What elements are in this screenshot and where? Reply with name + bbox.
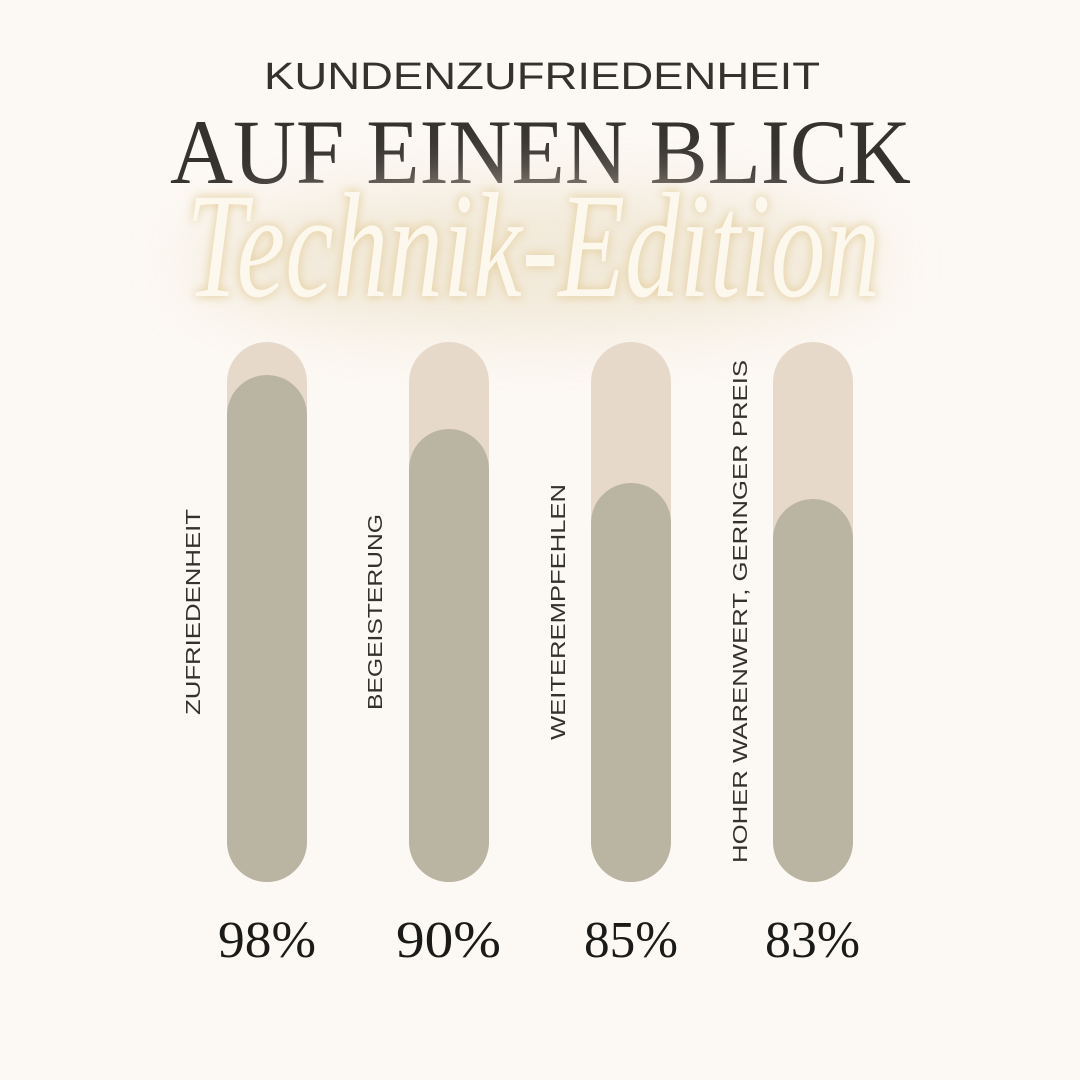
bar: Weiterempfehlen 85% xyxy=(591,342,671,882)
value: 85%: 85% xyxy=(584,912,678,969)
label: Hoher Warenwert, geringer Preis: HOHER WARENWERT, GERINGER PREIS xyxy=(730,360,752,863)
bar: Zufriedenheit 98% xyxy=(227,342,307,882)
value: 83%: 83% xyxy=(765,912,860,969)
heading: Kundenzufriedenheit: KUNDENZUFRIEDENHEIT xyxy=(264,56,820,98)
bar: Hoher Warenwert, geringer Preis 83% xyxy=(773,342,853,882)
label: Zufriedenheit: ZUFRIEDENHEIT xyxy=(183,509,205,715)
bar: Begeisterung 90% xyxy=(409,342,489,882)
value: 90%: 90% xyxy=(396,912,501,969)
title: Auf einen Blick: AUF EINEN BLICK xyxy=(170,101,911,203)
label: Weiterempfehlen: WEITEREMPFEHLEN xyxy=(548,484,570,740)
label: Begeisterung: BEGEISTERUNG xyxy=(365,514,387,710)
bar chart xyxy=(227,342,853,882)
value: 98%: 98% xyxy=(218,912,316,969)
